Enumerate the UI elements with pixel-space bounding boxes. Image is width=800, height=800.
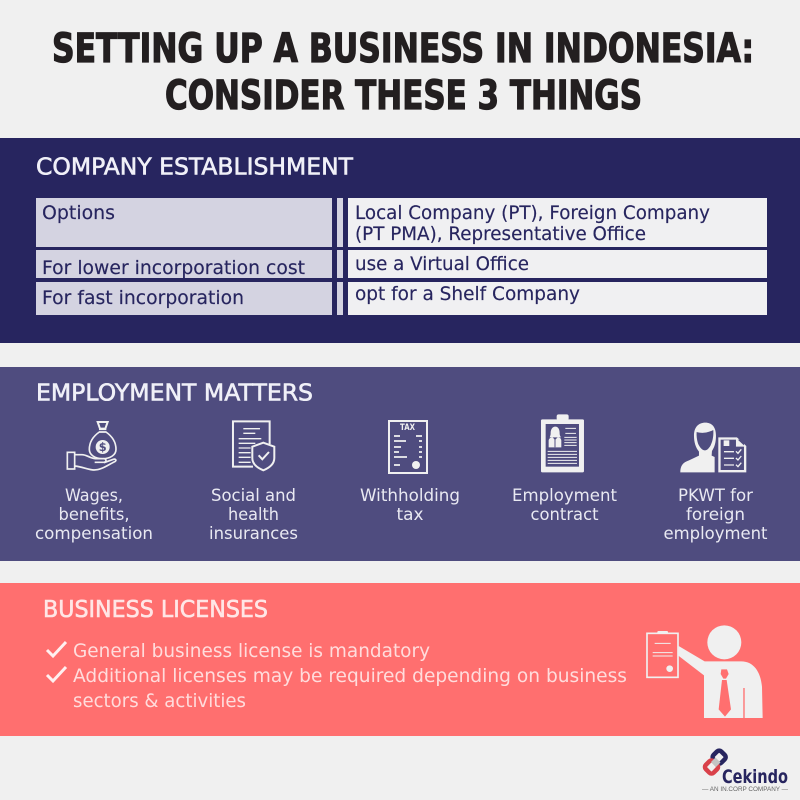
table: options xyxy=(36,198,767,315)
icon: tax document xyxy=(389,421,427,473)
label: pkwt for foreign employment: foreign xyxy=(686,505,745,525)
label: wages: Wages, xyxy=(65,486,123,506)
label: withholding tax: tax xyxy=(396,505,424,525)
table: options: use a Virtual Office xyxy=(355,253,529,275)
label: withholding tax: Withholding xyxy=(360,486,460,506)
icon: document with shield xyxy=(233,421,274,470)
label: wages xyxy=(35,486,153,544)
table: options: Local Company (PT), Foreign Company xyxy=(355,202,710,224)
icon: person with checklist xyxy=(680,423,746,472)
label: social and health insurances: insurances xyxy=(209,524,298,544)
table: options: opt for a Shelf Company xyxy=(355,283,580,305)
label: social and health insurances: Social and xyxy=(211,486,296,506)
icon: hand holding money bag xyxy=(67,422,116,470)
logo mark xyxy=(704,749,727,775)
heading: business licenses: BUSINESS LICENSES xyxy=(43,597,268,623)
label: employment contract: Employment xyxy=(512,486,617,506)
label: social and health insurances: health xyxy=(228,505,279,525)
title: CONSIDER THESE 3 THINGS xyxy=(165,73,642,119)
panel: company establishment xyxy=(0,138,800,343)
checklist xyxy=(47,640,627,712)
label: social and health insurances xyxy=(209,486,298,544)
label: employment contract xyxy=(512,486,617,525)
label: wages: compensation xyxy=(35,524,153,544)
logo tagline: — AN IN.CORP COMPANY — xyxy=(702,787,788,793)
checklist: General business license is mandatory xyxy=(73,640,430,662)
table: options: For fast incorporation xyxy=(42,287,244,309)
checklist: Additional licenses may be required depending on business xyxy=(73,665,627,687)
icon: hand holding money bag: $ xyxy=(99,440,107,454)
label: pkwt for foreign employment: employment xyxy=(664,524,768,544)
icon: employment contract clipboard xyxy=(541,414,584,472)
heading: company establishment: COMPANY ESTABLISHMENT xyxy=(36,154,354,180)
label: pkwt for foreign employment: PKWT for xyxy=(678,486,753,506)
label: wages: benefits, xyxy=(58,505,130,525)
panel: business licenses xyxy=(0,583,800,736)
label: employment contract: contract xyxy=(530,505,599,525)
checklist: sectors & activities xyxy=(73,690,246,712)
label: pkwt for foreign employment xyxy=(664,486,768,544)
label: withholding tax xyxy=(360,486,460,525)
icon: tax document: TAX xyxy=(400,423,415,433)
logo: Cekindo xyxy=(702,749,788,793)
table: options: Options xyxy=(42,202,115,224)
heading: employment matters: EMPLOYMENT MATTERS xyxy=(36,380,313,406)
table: options: (PT PMA), Representative Office xyxy=(355,223,646,245)
table: options: For lower incorporation cost xyxy=(42,257,305,279)
icon: man presenting document xyxy=(647,625,763,718)
title xyxy=(52,26,754,119)
panel: employment matters xyxy=(0,367,800,561)
